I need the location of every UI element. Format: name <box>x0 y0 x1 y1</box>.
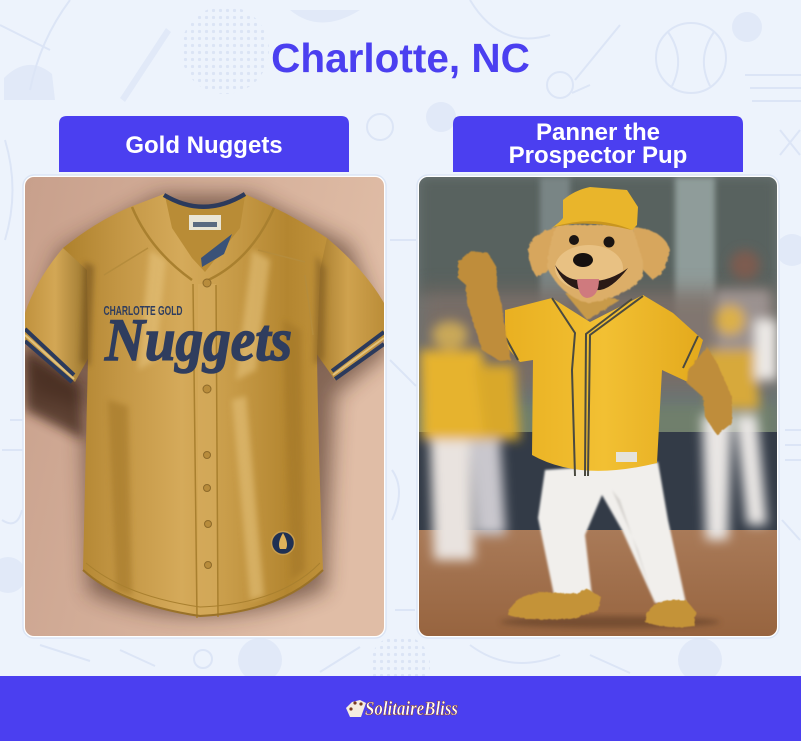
jersey body <box>63 194 327 616</box>
jersey hem badge <box>272 532 294 554</box>
jersey left sleeve <box>25 248 92 382</box>
mascot neck ruff <box>565 293 620 320</box>
right heading tab <box>453 116 743 172</box>
mascot feet <box>508 588 601 619</box>
mascot nose <box>573 253 593 267</box>
blurred background players <box>420 250 777 560</box>
jersey script wordmark: Nuggets <box>104 307 292 373</box>
right cuff stripes <box>332 332 384 371</box>
jersey collar seams <box>132 207 274 282</box>
mascot muzzle <box>555 245 623 291</box>
jersey neck tag <box>189 215 221 230</box>
mascot pants <box>538 462 686 603</box>
footer band <box>0 676 801 741</box>
panel: gold nuggets jersey <box>20 175 390 638</box>
jersey inner placket <box>201 234 232 267</box>
mascot jersey piping <box>552 296 643 476</box>
jersey shadow <box>20 195 390 616</box>
mascot <box>458 187 732 628</box>
mascot tongue <box>577 279 599 298</box>
mascot ears <box>528 227 560 277</box>
mascot cap <box>553 187 638 230</box>
right heading tab: Panner the <box>536 119 660 146</box>
left cuff stripes <box>25 329 74 375</box>
jersey hem <box>83 570 323 616</box>
mascot shadow <box>500 616 720 628</box>
left heading tab: Gold Nuggets <box>125 132 283 159</box>
jersey collar trim <box>164 194 245 207</box>
mascot jersey <box>505 295 703 471</box>
logo card icon <box>346 700 366 717</box>
jersey chest text: CHARLOTTE GOLD <box>104 303 182 318</box>
mascot eyes <box>569 235 579 245</box>
jersey placket <box>213 284 217 614</box>
jersey inner collar <box>165 196 245 272</box>
blurred stadium background <box>419 177 777 636</box>
jersey right sleeve <box>312 238 384 380</box>
mascot jersey tag <box>616 452 637 462</box>
logo wordmark: SolitaireBliss <box>365 698 458 720</box>
panel: panner the prospector pup mascot <box>417 175 779 638</box>
title: Charlotte, NC <box>271 35 530 81</box>
mascot mouth <box>555 265 628 290</box>
mascot left arm <box>458 251 511 361</box>
footer logo <box>346 698 458 720</box>
right heading tab: Prospector Pup <box>509 142 687 169</box>
jersey fold shading <box>80 250 326 600</box>
mascot right arm <box>687 347 732 435</box>
jersey buttons <box>203 279 212 568</box>
jersey illustration <box>25 194 384 618</box>
left heading tab <box>59 116 349 172</box>
mascot head <box>547 225 643 303</box>
